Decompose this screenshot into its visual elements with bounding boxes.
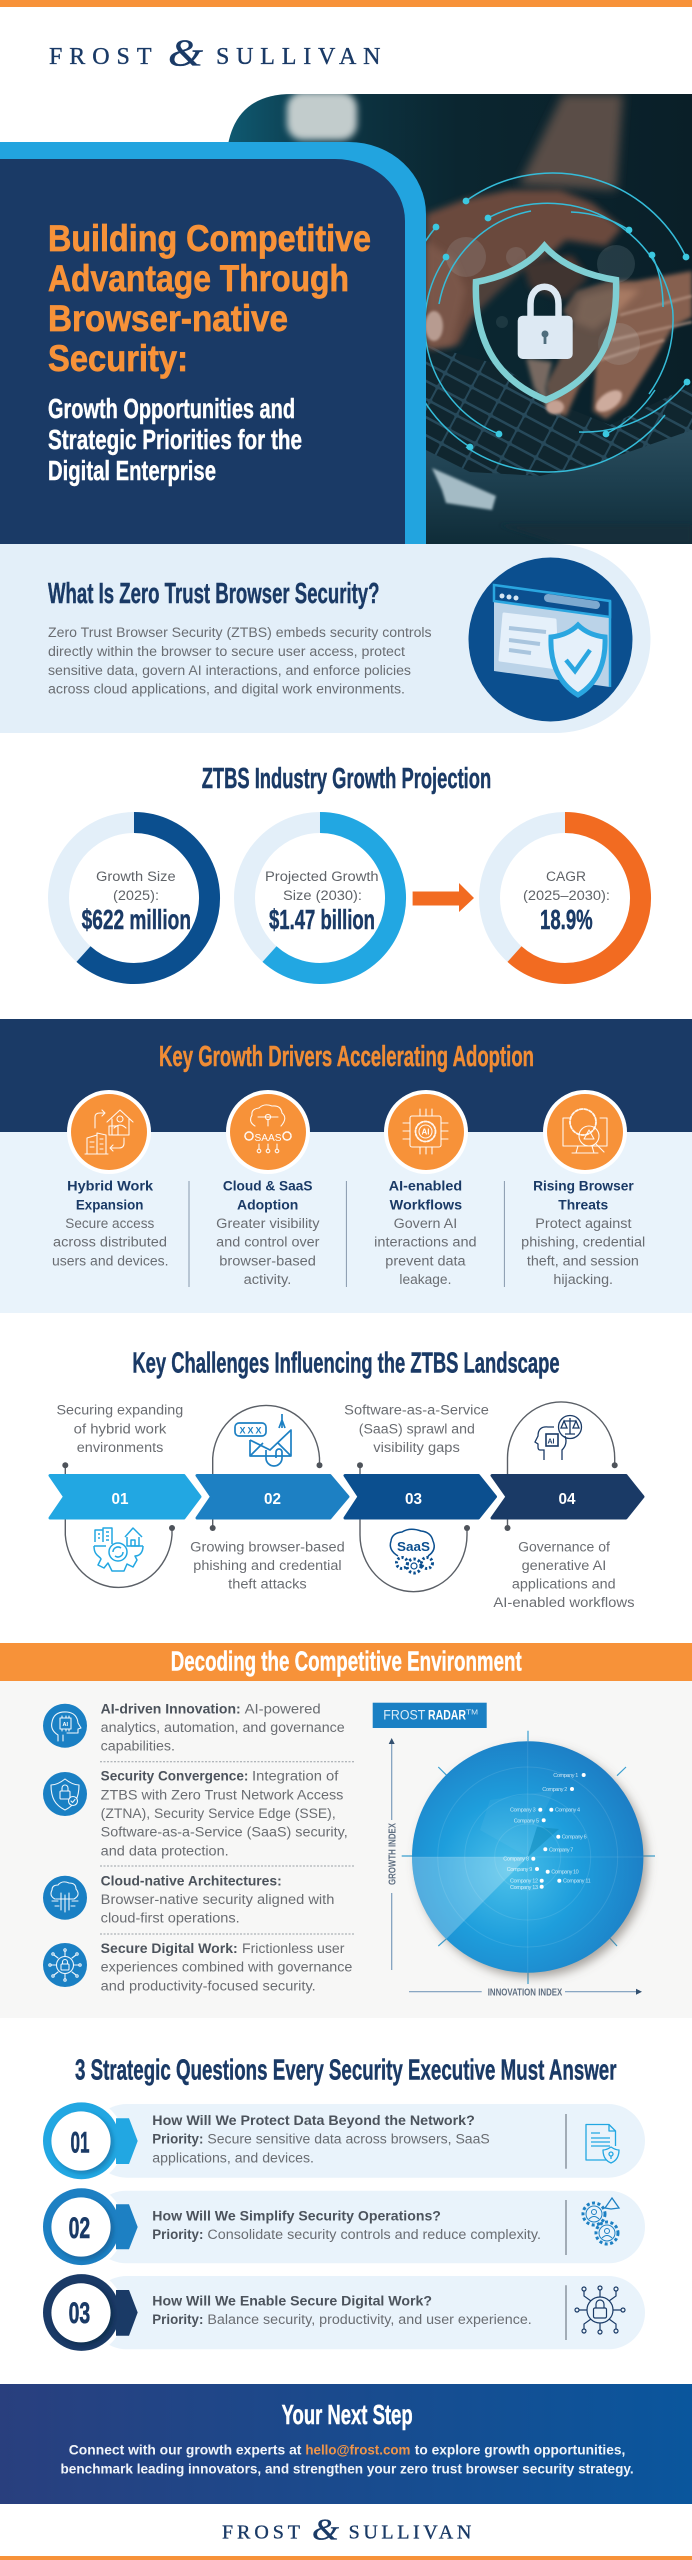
text: theft, and session — [527, 1253, 639, 1268]
text: Workflows — [390, 1196, 462, 1212]
text: challenge 3: Software-as-a-Service — [344, 1403, 489, 1418]
text: Balance security, productivity, and user experience. — [207, 2312, 532, 2327]
text: Rising Browser — [533, 1178, 634, 1194]
item: AI-driven innovation: AI — [62, 1722, 68, 1728]
chart: Frost Radar — [373, 1703, 655, 1998]
chevron 02 — [197, 1476, 348, 1518]
text: to explore growth opportunities, — [415, 2442, 625, 2458]
chevron 04: 04 — [558, 1491, 576, 1508]
heading: What Is Zero Trust Browser Security? — [48, 578, 380, 610]
icon: lock network — [575, 2286, 625, 2334]
text: Expansion — [76, 1196, 143, 1212]
icon: gears with alert — [583, 2198, 619, 2244]
text — [101, 1769, 348, 1858]
text: AI — [548, 1438, 555, 1446]
radar company points: Company 12 — [510, 1879, 538, 1885]
paragraph: sensitive data, govern AI interactions, and enforce policies — [48, 663, 411, 678]
text: Govern AI — [394, 1216, 457, 1231]
chevron 03 — [345, 1476, 496, 1518]
text — [52, 1178, 168, 1268]
icon: saas cloud gears — [390, 1529, 434, 1573]
chart: donut growth size 2025 — [58, 822, 210, 974]
chart: donut growth size 2025: $622 million — [82, 904, 191, 935]
growth index axis — [388, 1738, 398, 1970]
text: Consolidate security controls and reduce complexity. — [207, 2227, 541, 2242]
text: Integration of — [252, 1769, 339, 1784]
panel: decoding the competitive environment — [0, 1643, 692, 2018]
radar company points: Company 8 — [503, 1857, 529, 1863]
text: interactions and — [374, 1235, 477, 1250]
text: challenge 2: theft attacks — [228, 1577, 307, 1592]
radar company points: Company 2 — [542, 1787, 567, 1793]
text: Priority: — [152, 2312, 203, 2327]
question 2 — [38, 2184, 645, 2270]
text: applications, and devices. — [152, 2150, 314, 2165]
item: security convergence — [43, 1769, 348, 1858]
panel: hero title — [0, 142, 426, 544]
icon: shield outline — [476, 246, 616, 400]
icon: padlock — [518, 287, 573, 359]
text — [60, 2442, 634, 2476]
text — [152, 2113, 490, 2165]
text: activity. — [244, 1272, 291, 1287]
title: Browser-native — [48, 298, 288, 339]
text — [101, 1941, 352, 1993]
text: experiences combined with governance — [101, 1960, 352, 1975]
driver: ai-enabled workflows — [374, 1090, 477, 1287]
text: benchmark leading innovators, and strengthen your zero trust browser security strategy. — [60, 2460, 634, 2476]
text: Adoption — [237, 1196, 298, 1212]
text: challenge 4: generative AI — [522, 1558, 606, 1573]
text: AI-powered — [245, 1701, 321, 1716]
text: and data protection. — [101, 1843, 229, 1858]
timeline: challenges connectors and chevrons — [50, 1402, 643, 1592]
radar company points: Company 11 — [563, 1879, 591, 1885]
item: cloud-native architectures — [43, 1873, 334, 1926]
chart: donut projected growth size 2030: Projected Growth — [265, 869, 379, 884]
top accent bar — [0, 0, 692, 7]
logo: Frost & Sullivan footer: FROST — [222, 2521, 300, 2543]
text — [101, 1701, 345, 1754]
growth index axis: GROWTH INDEX — [388, 1823, 398, 1885]
text: challenge 1 — [56, 1403, 183, 1455]
panel: key growth drivers — [0, 1019, 692, 1313]
text: Hybrid Work — [67, 1178, 153, 1194]
text: challenge 4: applications and — [512, 1577, 616, 1592]
radar circle — [417, 1747, 647, 1977]
innovation index axis: INNOVATION INDEX — [488, 1987, 563, 1998]
chevron 01: 01 — [112, 1491, 129, 1508]
radar company points: Company 6 — [562, 1835, 587, 1841]
text: phishing, credential — [521, 1235, 645, 1250]
item: secure digital work — [43, 1941, 352, 1993]
icon: AI head and scales — [535, 1416, 582, 1460]
title: Security: — [48, 338, 188, 379]
innovation index axis — [409, 1987, 642, 1998]
driver: cloud and saas adoption: SAAS — [254, 1133, 282, 1144]
subtitle — [48, 393, 302, 486]
icon: cloud saas — [245, 1105, 291, 1153]
icon: saas cloud gears: SaaS — [397, 1539, 430, 1554]
text — [374, 1178, 477, 1287]
heading: Decoding the Competitive Environment — [171, 1646, 522, 1677]
icon: hybrid work — [85, 1110, 133, 1154]
text: challenge 2 — [190, 1539, 345, 1592]
radar label: TM — [466, 1710, 478, 1716]
icon: browser with shield — [468, 558, 632, 722]
text: Priority: — [152, 2227, 203, 2242]
heading: Your Next Step — [282, 2399, 413, 2430]
chart: donut projected growth size 2030 — [244, 822, 396, 974]
text — [152, 2293, 532, 2327]
radar company points: Company 7 — [549, 1847, 573, 1853]
logo: Frost & Sullivan footer: SULLIVAN — [349, 2521, 471, 2543]
radar company points: Company 9 — [507, 1867, 532, 1873]
text: challenge 4: Governance of — [518, 1539, 610, 1554]
text: AI-enabled — [389, 1178, 462, 1194]
icon: lock network — [49, 1949, 81, 1981]
text: capabilities. — [101, 1739, 175, 1754]
subtitle: Growth Opportunities and — [48, 393, 295, 424]
text: and productivity-focused security. — [101, 1978, 316, 1993]
chevron 03: 03 — [405, 1491, 422, 1508]
text: Frictionless user — [242, 1941, 345, 1956]
text: XXX — [240, 1426, 262, 1436]
subtitle: Strategic Priorities for the — [48, 424, 302, 455]
radar ticks — [402, 1731, 655, 1984]
icon: security rings — [401, 173, 690, 472]
text: hijacking. — [553, 1272, 613, 1287]
text: challenge 3: visibility gaps — [373, 1440, 460, 1455]
text: Secure access — [65, 1216, 155, 1231]
hero photo: hands typing with security shield — [226, 92, 692, 544]
radar company points: Company 10 — [551, 1870, 579, 1876]
text: Software-as-a-Service (SaaS) security, — [101, 1825, 348, 1840]
text: challenge 2: phishing and credential — [193, 1558, 342, 1573]
icon: document with shield — [586, 2124, 619, 2163]
text: ZTBS with Zero Trust Network Access — [101, 1787, 344, 1802]
text: challenge 3 — [344, 1403, 489, 1455]
text: challenge 3: (SaaS) sprawl and — [359, 1421, 475, 1436]
logo: Frost & Sullivan header: & — [168, 32, 204, 74]
text: across distributed — [53, 1235, 167, 1250]
radar company points: Company 3 — [510, 1808, 536, 1814]
text: Threats — [558, 1196, 608, 1212]
title: Advantage Through — [48, 258, 349, 299]
text: Priority: — [152, 2132, 203, 2147]
text: How Will We Enable Secure Digital Work? — [152, 2293, 432, 2308]
chevron 04 — [492, 1476, 643, 1518]
text: Secure sensitive data across browsers, SaaS — [207, 2132, 490, 2147]
radar company points — [503, 1773, 591, 1891]
text: How Will We Simplify Security Operations? — [152, 2208, 441, 2223]
chevron 02: 02 — [264, 1491, 281, 1508]
title: Building Competitive — [48, 218, 371, 259]
chart: donut projected growth size 2030: Size (2030): — [283, 888, 362, 903]
text: cloud-first operations. — [101, 1911, 240, 1926]
text: prevent data — [385, 1253, 466, 1268]
chart: donut CAGR: 18.9% — [540, 904, 593, 935]
radar company points: Company 13 — [510, 1885, 538, 1891]
text: challenge 4 — [493, 1539, 635, 1610]
radar label — [373, 1703, 487, 1728]
panel: what is zero trust browser security — [0, 544, 650, 733]
icon: shield lock — [51, 1779, 79, 1810]
logo: Frost & Sullivan header: FROST — [49, 44, 152, 70]
text: Secure Digital Work: — [101, 1941, 238, 1956]
heading: growth projection: ZTBS Industry Growth Projection — [202, 763, 491, 795]
icon: city and gear — [94, 1528, 143, 1571]
panel: your next step call to action — [0, 2384, 692, 2504]
icon: phishing envelope — [235, 1414, 291, 1466]
text — [521, 1178, 645, 1287]
driver: rising browser threats — [521, 1090, 645, 1287]
text: and control over — [216, 1235, 320, 1250]
text: challenge 1: of hybrid work — [74, 1421, 167, 1436]
chevron 01 — [50, 1476, 200, 1518]
text: analytics, automation, and governance — [101, 1720, 345, 1735]
question 3 — [38, 2270, 645, 2356]
radar company points: Company 1 — [553, 1773, 578, 1779]
chart: donut projected growth size 2030: $1.47 billion — [269, 904, 375, 935]
logo: Frost & Sullivan header: SULLIVAN — [216, 44, 380, 70]
radar company points: Company 4 — [555, 1808, 580, 1814]
driver: hybrid work expansion — [52, 1090, 168, 1268]
bottom accent bar — [0, 2556, 692, 2560]
text — [216, 1178, 320, 1287]
question 1 — [38, 2098, 645, 2184]
driver: cloud and saas adoption — [216, 1090, 320, 1287]
paragraph: directly within the browser to secure user access, protect — [48, 644, 405, 659]
logo: Frost & Sullivan footer — [222, 2512, 471, 2546]
icon: cloud circuit — [51, 1882, 78, 1912]
chart: donut CAGR: CAGR — [546, 869, 586, 884]
chart: donut growth size 2025: (2025): — [113, 888, 159, 903]
text: (ZTNA), Security Service Edge (SSE), — [101, 1806, 336, 1821]
arrow — [413, 883, 474, 912]
text: challenge 2: Growing browser-based — [190, 1539, 345, 1554]
text: browser-based — [219, 1253, 316, 1268]
logo: Frost & Sullivan header — [49, 32, 380, 74]
subtitle: Digital Enterprise — [48, 455, 216, 486]
text: hello@frost.com — [305, 2442, 410, 2458]
text — [152, 2208, 541, 2242]
paragraph: across cloud applications, and digital work environments. — [48, 682, 405, 696]
icon: threat monitor — [563, 1109, 607, 1153]
text: AI-driven Innovation: — [101, 1701, 241, 1716]
text: challenge 4: AI-enabled workflows — [493, 1595, 635, 1610]
text: Cloud-native Architectures: — [101, 1873, 282, 1888]
question 1: 01 — [70, 2126, 90, 2159]
question 2: 02 — [69, 2212, 90, 2245]
text: users and devices. — [52, 1253, 168, 1268]
paragraph: Zero Trust Browser Security (ZTBS) embeds security controls — [48, 625, 432, 640]
text: Cloud & SaaS — [223, 1178, 312, 1194]
icon: AI head — [52, 1712, 81, 1741]
text: challenge 1: Securing expanding — [56, 1403, 183, 1418]
text: How Will We Protect Data Beyond the Network? — [152, 2113, 475, 2128]
text: Security Convergence: — [101, 1769, 248, 1784]
icon: AI chip — [403, 1109, 448, 1154]
chart: donut CAGR — [490, 822, 641, 974]
text: Connect with our growth experts at — [69, 2442, 302, 2458]
text: leakage. — [399, 1272, 451, 1287]
text: Protect against — [535, 1216, 632, 1231]
text — [101, 1873, 334, 1926]
chart: donut CAGR: (2025–2030): — [523, 888, 610, 903]
paragraph — [48, 625, 432, 696]
radar company points: Company 5 — [514, 1818, 539, 1824]
question 3: 03 — [69, 2297, 90, 2330]
text: challenge 1: environments — [77, 1440, 164, 1455]
driver: ai-enabled workflows: AI — [422, 1128, 430, 1136]
text: Browser-native security aligned with — [101, 1892, 334, 1907]
radar label: RADAR — [428, 1708, 466, 1722]
chart: donut growth size 2025: Growth Size — [96, 869, 176, 884]
text: Greater visibility — [216, 1216, 320, 1231]
radar label: FROST — [383, 1708, 425, 1722]
item: AI-driven innovation — [43, 1701, 345, 1754]
logo: Frost & Sullivan footer: & — [312, 2512, 339, 2546]
title — [48, 218, 371, 379]
